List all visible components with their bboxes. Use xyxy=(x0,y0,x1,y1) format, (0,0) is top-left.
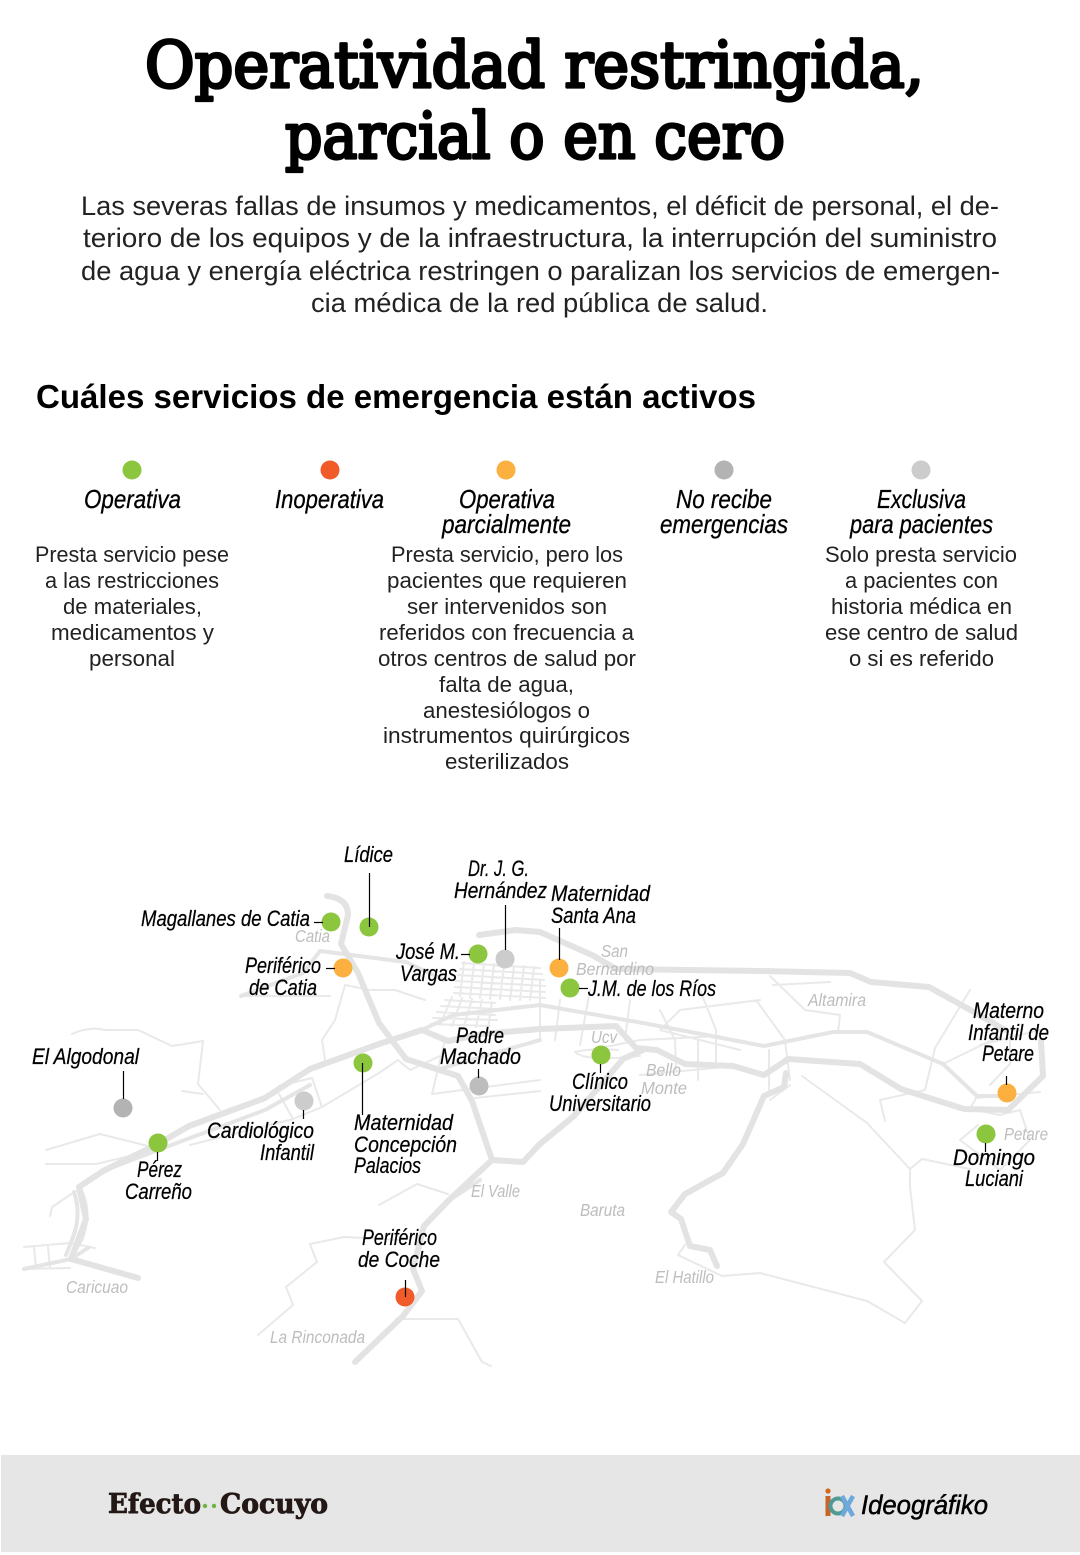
marker: Materno Infantil de Petare: Infantil de xyxy=(968,1020,1049,1045)
marker: José M. Vargas xyxy=(395,939,488,986)
footer band xyxy=(1,1455,1080,1552)
intro text block: de agua y energía eléctrica restringen o paralizan los servicios de emergen- xyxy=(81,256,1000,286)
marker: Maternidad Santa Ana: Maternidad xyxy=(551,881,651,906)
legend: operativa: Presta servicio pese xyxy=(35,542,229,567)
marker: Periférico de Catia: de Catia xyxy=(249,975,317,1000)
map: place names: La Rinconada xyxy=(270,1327,365,1347)
legend: exclusiva para pacientes: ese centro de salud xyxy=(825,620,1018,645)
intro text block: Las severas fallas de insumos y medicamentos, el déficit de personal, el de- xyxy=(81,191,999,221)
logo: Efecto Cocuyo: Efecto xyxy=(108,1489,201,1520)
marker: José M. Vargas: José M. xyxy=(395,939,460,964)
map: place names: Catia xyxy=(295,926,330,946)
marker: Padre Machado: Padre xyxy=(456,1023,504,1048)
logo: Efecto Cocuyo: Cocuyo xyxy=(220,1489,328,1520)
marker: Pérez Carreño: Carreño xyxy=(125,1179,192,1204)
marker: Domingo Luciani: Domingo xyxy=(953,1145,1035,1170)
marker: Lídice: Lídice xyxy=(344,842,393,867)
marker: El Algodonal xyxy=(32,1044,140,1118)
section heading: Cuáles servicios de emergencia están activos xyxy=(36,378,756,415)
marker: Clínico Universitario: Clínico xyxy=(572,1069,628,1094)
legend: no recibe emergencias: No recibe xyxy=(676,484,772,514)
map: place names: Altamira xyxy=(807,990,866,1010)
map: place names: Baruta xyxy=(580,1200,625,1220)
legend: operativa xyxy=(35,460,229,671)
legend: inoperativa xyxy=(275,460,384,514)
legend: operativa parcialmente: otros centros de salud por xyxy=(378,646,636,671)
legend: operativa parcialmente: Presta servicio, pero los xyxy=(391,542,623,567)
marker: Periférico de Coche xyxy=(358,1225,440,1306)
logo: Ideográfiko: Ideográfiko xyxy=(861,1490,988,1520)
legend: operativa: Operativa xyxy=(84,484,181,514)
logo: Efecto Cocuyo xyxy=(108,1489,328,1520)
legend: exclusiva para pacientes: Exclusiva xyxy=(877,484,966,514)
legend: exclusiva para pacientes: historia médica en xyxy=(831,594,1012,619)
marker: Materno Infantil de Petare xyxy=(968,998,1049,1102)
marker: Dr. J. G. Hernández xyxy=(454,856,547,968)
marker: Cardiológico Infantil: Cardiológico xyxy=(207,1118,314,1143)
marker: Padre Machado xyxy=(440,1023,521,1096)
marker: Pérez Carreño: Pérez xyxy=(137,1157,182,1182)
legend: operativa parcialmente: falta de agua, xyxy=(439,672,574,697)
legend: operativa parcialmente: Operativa xyxy=(459,484,555,514)
title xyxy=(145,29,924,174)
marker: Domingo Luciani xyxy=(953,1124,1035,1191)
map: place names: Bernardino xyxy=(576,959,654,979)
marker: Maternidad Concepción Palacios: Maternidad xyxy=(354,1110,454,1135)
marker: Dr. J. G. Hernández: Dr. J. G. xyxy=(468,856,529,881)
marker: J.M. de los Ríos: J.M. de los Ríos xyxy=(587,976,716,1001)
marker: Maternidad Santa Ana xyxy=(550,881,651,978)
map: place names: Caricuao xyxy=(66,1277,128,1297)
legend: operativa parcialmente: ser intervenidos son xyxy=(407,594,607,619)
marker: Cardiológico Infantil xyxy=(207,1092,315,1165)
marker: José M. Vargas: Vargas xyxy=(400,961,457,986)
marker: Maternidad Concepción Palacios xyxy=(354,1054,457,1178)
map: place names: El Hatillo xyxy=(655,1267,714,1287)
map: place names: Ucv xyxy=(591,1027,618,1047)
marker: Maternidad Concepción Palacios: Palacios xyxy=(354,1153,421,1178)
marker: Periférico de Catia xyxy=(245,953,352,1000)
legend: operativa parcialmente: referidos con frecuencia a xyxy=(379,620,635,645)
map: road network of Caracas xyxy=(24,896,1043,1366)
map: place names: Monte xyxy=(641,1078,687,1098)
marker: Periférico de Coche: de Coche xyxy=(358,1247,440,1272)
map: place names: El Valle xyxy=(471,1181,520,1201)
marker: Dr. J. G. Hernández: Hernández xyxy=(454,878,547,903)
marker: Maternidad Santa Ana: Santa Ana xyxy=(551,903,636,928)
marker: Domingo Luciani: Luciani xyxy=(965,1166,1024,1191)
marker: J.M. de los Ríos xyxy=(560,976,716,1001)
intro text block xyxy=(81,191,1000,318)
marker: Maternidad Concepción Palacios: Concepción xyxy=(354,1132,457,1157)
marker: Materno Infantil de Petare: Petare xyxy=(982,1041,1034,1066)
map: place names xyxy=(66,926,1048,1347)
marker: Magallanes de Catia: Magallanes de Catia xyxy=(141,906,310,931)
marker: Clínico Universitario: Universitario xyxy=(549,1091,651,1116)
map: place names: San xyxy=(601,941,628,961)
legend: operativa: medicamentos y xyxy=(51,620,214,645)
marker: El Algodonal: El Algodonal xyxy=(32,1044,140,1069)
legend: inoperativa: Inoperativa xyxy=(275,484,384,514)
intro text block: cia médica de la red pública de salud. xyxy=(311,288,768,318)
marker: Clínico Universitario xyxy=(549,1046,651,1116)
legend: exclusiva para pacientes xyxy=(825,460,1018,671)
legend: no recibe emergencias: emergencias xyxy=(660,509,788,539)
legend: operativa: a las restricciones xyxy=(45,568,219,593)
legend: operativa: de materiales, xyxy=(63,594,202,619)
intro text block: terioro de los equipos y de la infraestructura, la interrupción del suministro xyxy=(83,223,997,253)
map: place names: Petare xyxy=(1004,1124,1048,1144)
marker: Materno Infantil de Petare: Materno xyxy=(973,998,1044,1023)
title: parcial o en cero xyxy=(285,100,785,174)
legend: exclusiva para pacientes: a pacientes con xyxy=(845,568,998,593)
marker: Periférico de Coche: Periférico xyxy=(362,1225,437,1250)
map: place names: Bello xyxy=(646,1060,681,1080)
legend: exclusiva para pacientes: o si es referido xyxy=(849,646,994,671)
legend: operativa parcialmente: esterilizados xyxy=(445,749,569,774)
marker: Pérez Carreño xyxy=(125,1134,192,1204)
legend: exclusiva para pacientes: Solo presta servicio xyxy=(825,542,1017,567)
legend: operativa parcialmente: anestesiólogos o xyxy=(423,698,590,723)
legend: operativa parcialmente: instrumentos quirúrgicos xyxy=(383,723,630,748)
legend: operativa: personal xyxy=(89,646,175,671)
legend: exclusiva para pacientes: para pacientes xyxy=(849,509,993,539)
title: Operatividad restringida, xyxy=(145,29,924,103)
marker: Periférico de Catia: Periférico xyxy=(245,953,321,978)
legend: operativa parcialmente xyxy=(378,460,636,774)
marker: Padre Machado: Machado xyxy=(440,1044,521,1069)
legend: operativa parcialmente: pacientes que requieren xyxy=(387,568,627,593)
legend: operativa parcialmente: parcialmente xyxy=(441,509,571,539)
marker: Lídice xyxy=(344,842,393,936)
legend: no recibe emergencias xyxy=(660,460,788,539)
marker: Cardiológico Infantil: Infantil xyxy=(260,1140,315,1165)
